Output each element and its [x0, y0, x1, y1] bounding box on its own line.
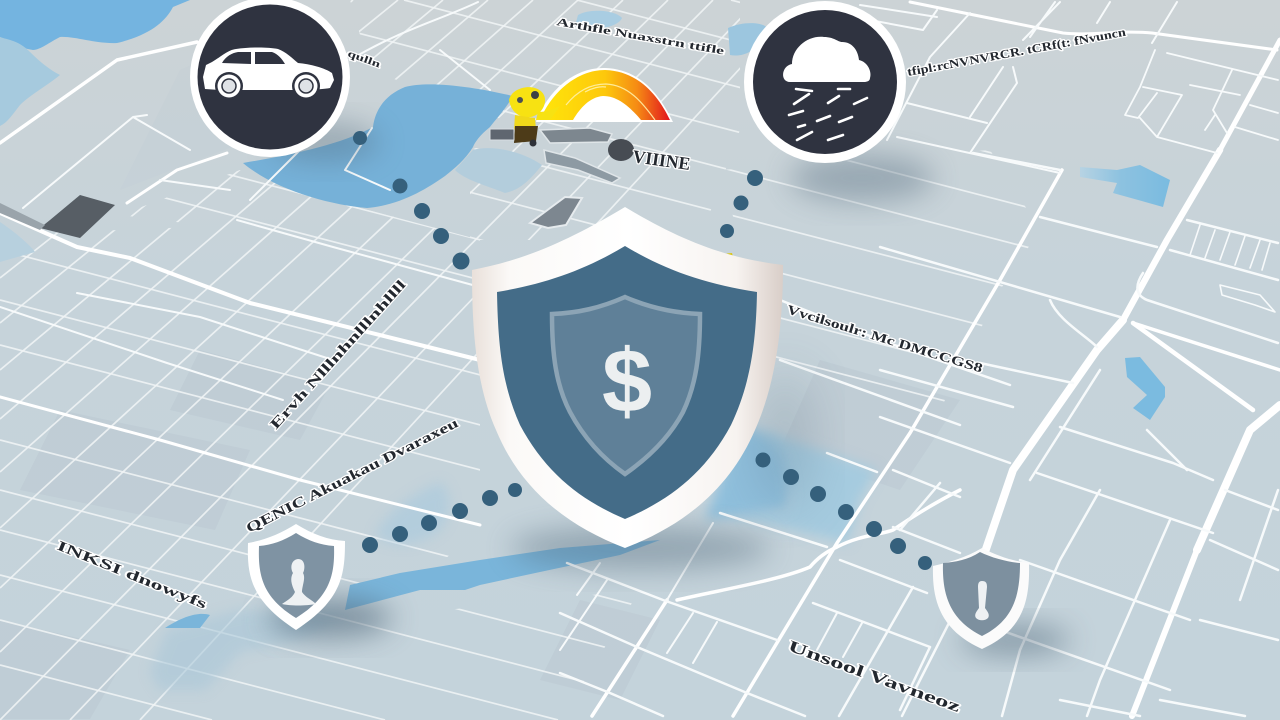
- water: pale flood area: [150, 610, 345, 690]
- small shield: left: [248, 524, 345, 630]
- water: pale patch above left shield: [375, 482, 449, 544]
- bee mascot: [490, 87, 560, 146]
- rain streaks: [789, 89, 867, 140]
- map tone blocks: [0, 10, 960, 719]
- water: top-left bay: [0, 0, 190, 50]
- secondary streets left: [0, 2, 490, 400]
- water: river channel: [165, 614, 210, 628]
- water: left shore: [0, 37, 60, 126]
- dotted connector: right shield to shield: [756, 452, 932, 570]
- water: central lake: [243, 84, 513, 208]
- map label: near car: qulln: [346, 48, 382, 71]
- map label: top centre: Arthfle Nuaxstrn ttifle: [555, 16, 725, 58]
- shield rim: [472, 207, 783, 548]
- small yellow bee: [721, 253, 735, 264]
- water: lake lower lobe: [455, 148, 542, 193]
- water: left edge tint: [0, 222, 35, 262]
- icon: droplet stack: [282, 559, 316, 606]
- map label: bottom right: Unsool Vavneoz: [786, 638, 962, 716]
- shield face: [497, 246, 757, 519]
- water: upper right pond: [1080, 165, 1170, 207]
- rainbow gauge: [536, 68, 673, 122]
- icon: car badge: [190, 0, 350, 157]
- street cluster upper right: [1125, 50, 1278, 153]
- water: basin beside shield: [720, 430, 877, 543]
- streets east blocks: [880, 153, 1278, 533]
- inner shield: [552, 297, 700, 474]
- map label: above left shield: QENIC Akuakau Dvaraxeu: [244, 416, 461, 537]
- map label: upper right: tfipl:rcNVNVRCR. tCRf(t: fNvuncn: [906, 25, 1127, 79]
- map label: right of shield: Vvcilsoulr: Mc DMCCGS8: [785, 302, 985, 376]
- water: river: [345, 540, 660, 610]
- map label: far left: INKSI dnowyfs: [55, 539, 209, 613]
- icon: exclamation mark: [975, 581, 989, 620]
- small shield: right: [933, 548, 1029, 649]
- smudged grey map marks: [0, 128, 634, 238]
- car windows: [222, 52, 285, 64]
- streets right of centre: [780, 300, 1010, 425]
- dotted connector: cloud to shield: [720, 170, 763, 238]
- map label: smudged text: VIIINE: [631, 146, 692, 174]
- dotted connector: car to shield: [353, 131, 470, 270]
- secondary streets top right: [860, 2, 1177, 173]
- icon: rain cloud badge: [744, 1, 906, 163]
- water: right pond: [1125, 357, 1165, 420]
- dollar sign: $: [602, 332, 652, 432]
- streets lower right: [900, 483, 1278, 716]
- main shield with dollar sign: [472, 207, 783, 548]
- cloud: [783, 37, 871, 82]
- streets running south to north: [0, 0, 803, 720]
- dotted connector: left shield to shield: [362, 483, 522, 553]
- water: top ponds: [575, 11, 622, 29]
- map label: diagonal left: Ervh Nlllnhnlllnhllll: [268, 278, 410, 433]
- streets lower middle: [560, 453, 960, 716]
- car wheels: [215, 72, 320, 100]
- car body: [203, 48, 334, 90]
- shadows under icons: [268, 122, 1070, 656]
- water: basin near shield: [705, 425, 790, 520]
- water: pond near cloud: [728, 23, 768, 56]
